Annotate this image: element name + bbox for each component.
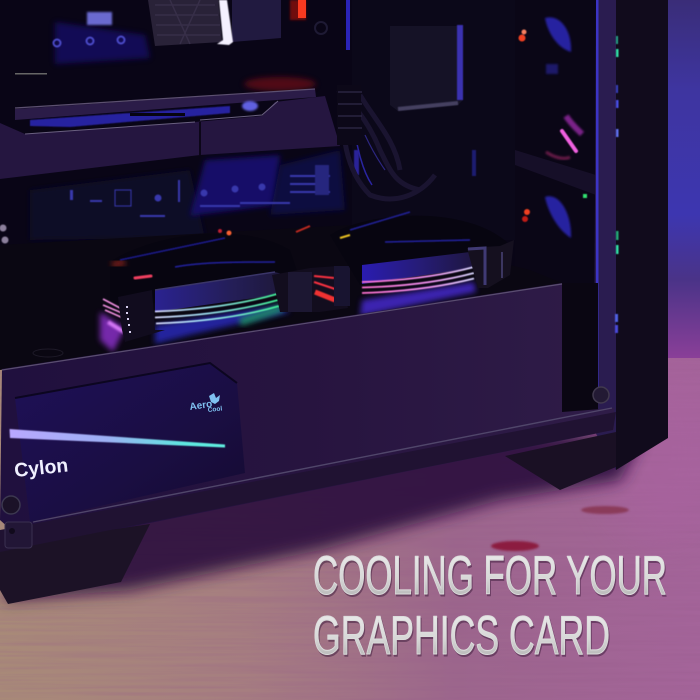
pink fan streaks [562, 131, 576, 151]
graphics card top strip [15, 89, 316, 120]
wood knot: right [581, 506, 629, 514]
background wall [667, 0, 700, 358]
left fan light strips [155, 294, 281, 324]
left fan floor glow [155, 305, 290, 344]
panel edge LEDs [583, 36, 618, 333]
right fan clamp [467, 240, 514, 288]
table surface [0, 350, 700, 700]
CPU cooler block [148, 0, 350, 50]
shelf surface with fan bay [0, 225, 598, 418]
dark backplate [352, 0, 517, 240]
Cylon label: Cylon [13, 454, 69, 482]
bundled cables [337, 85, 435, 199]
wood knot: centre [491, 541, 539, 551]
PSU shroud front face [0, 283, 614, 547]
case side panel [583, 0, 668, 470]
shadow under case [0, 430, 640, 600]
blue fan blades [545, 17, 571, 52]
RGB fan right [296, 212, 514, 316]
lower board circuitry [30, 150, 345, 240]
left edge connectors [0, 224, 12, 276]
left fan pink strips [103, 299, 123, 318]
graphics card blue slit [30, 106, 230, 127]
graphics card [0, 89, 340, 179]
motherboard upper area [15, 12, 316, 91]
right fan floor glow [360, 282, 476, 316]
title [313, 544, 668, 668]
AeroCool logo: Cool [207, 405, 223, 414]
left fan rim [155, 272, 282, 312]
PSU cover panel [10, 363, 245, 522]
AeroCool logo [189, 393, 223, 414]
left fan clamp [118, 290, 165, 342]
RGB fan left [100, 229, 300, 352]
RGB fan centre clamp [272, 266, 350, 312]
case front foot right [505, 432, 616, 490]
right fan light strips [362, 267, 474, 293]
light bar [10, 429, 225, 448]
red status LEDs [518, 30, 530, 222]
right fan rim [362, 252, 475, 284]
case thumbscrews [2, 387, 609, 548]
AeroCool logo: Aero [189, 399, 213, 413]
shroud lower strip edge [33, 408, 612, 522]
right side fans [515, 0, 597, 345]
case front foot left [0, 524, 150, 604]
case lower rail [0, 412, 616, 552]
